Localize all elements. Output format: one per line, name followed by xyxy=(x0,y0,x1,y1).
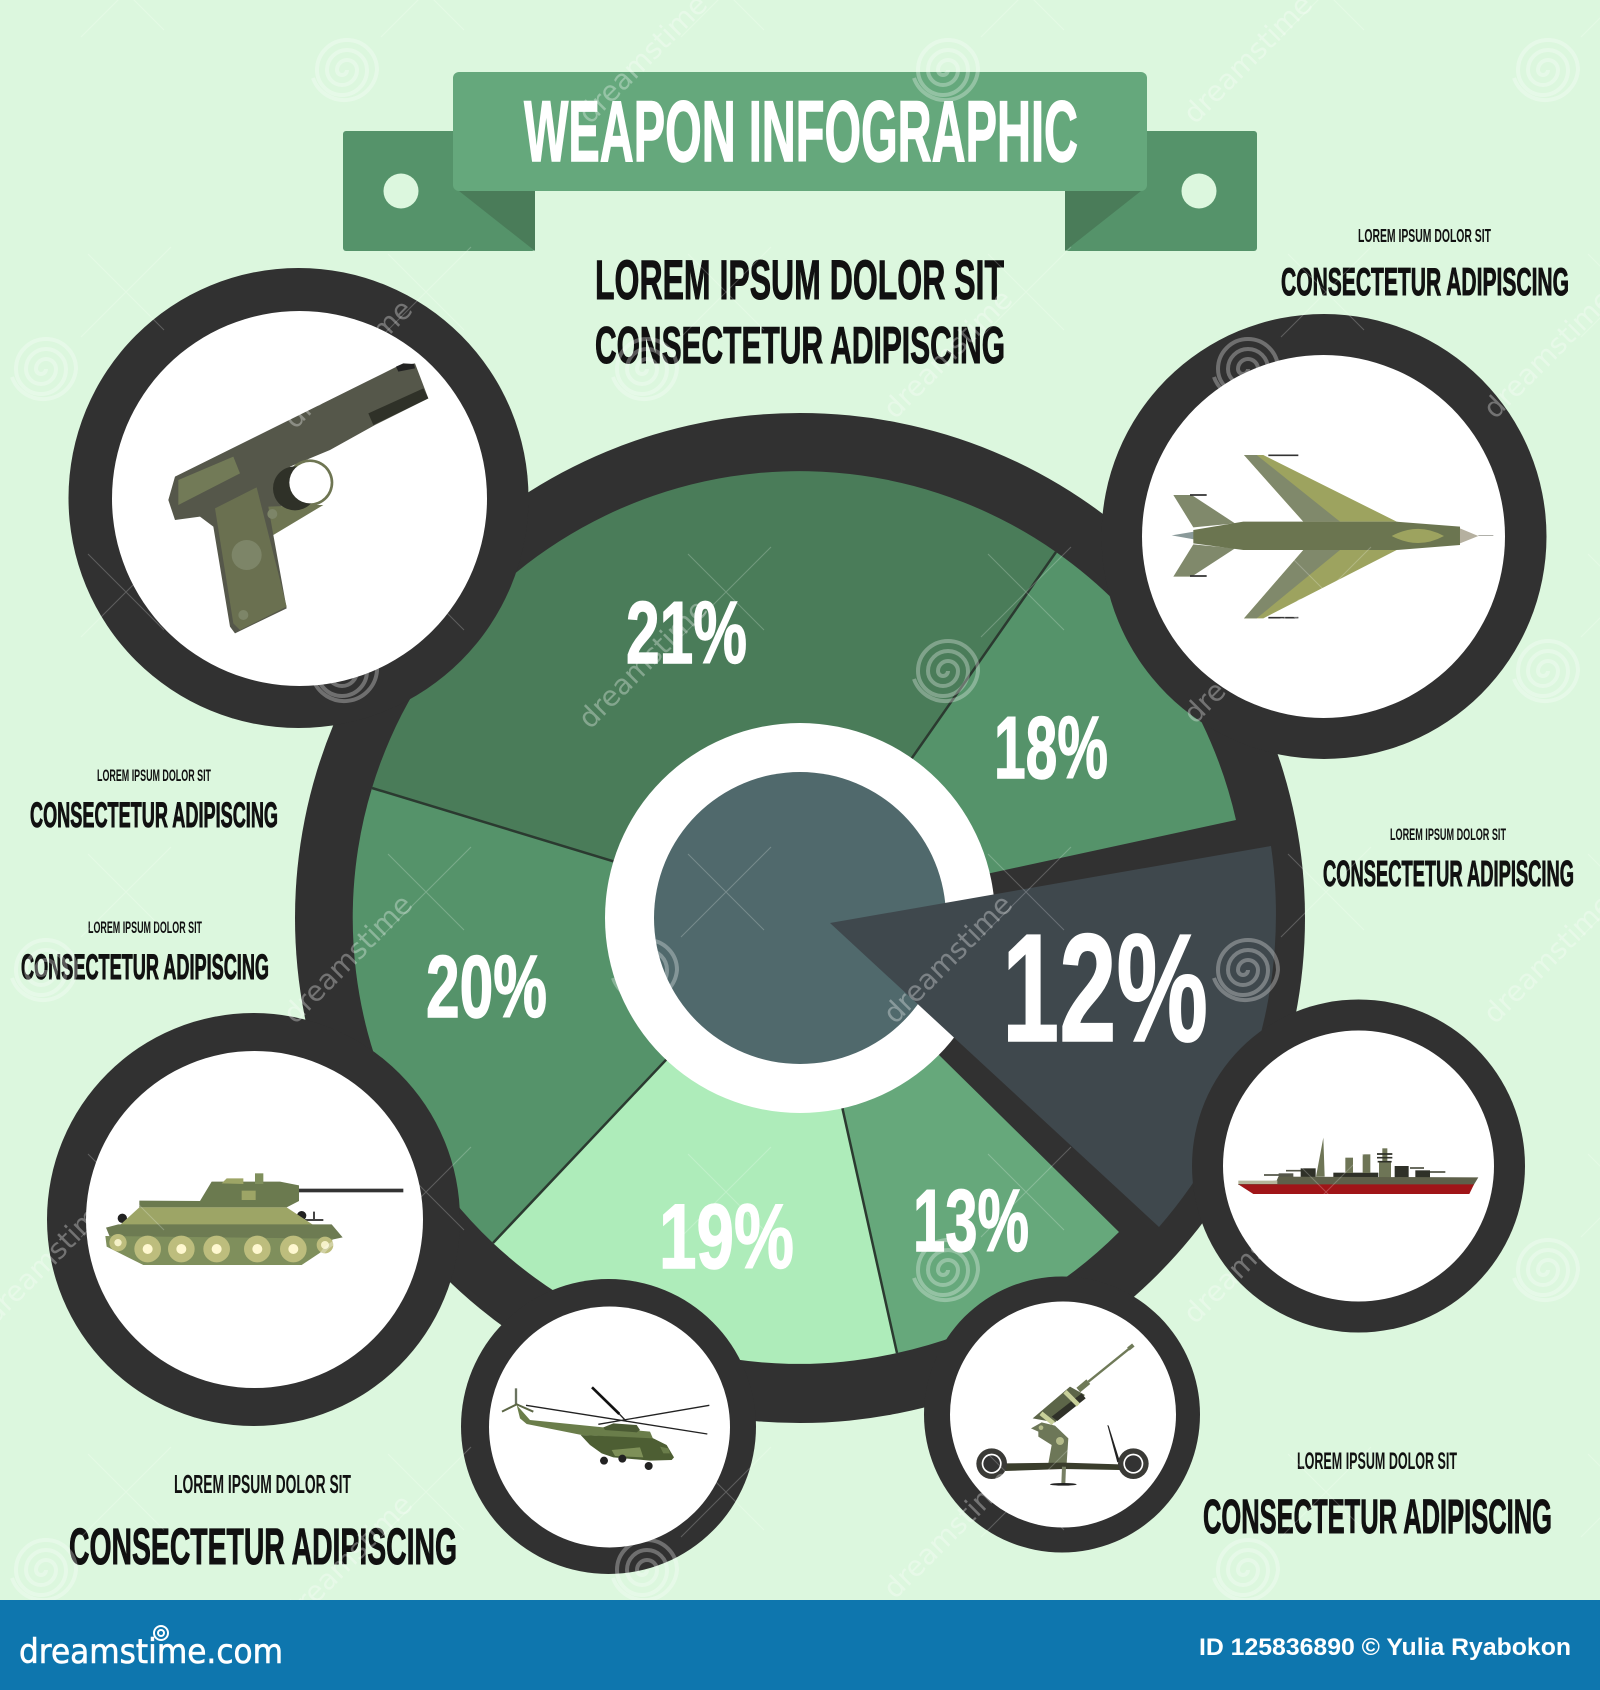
footer bar xyxy=(0,1600,1600,1690)
icon: tank xyxy=(105,1173,403,1265)
chart dark base xyxy=(295,413,1305,1423)
banner right hole xyxy=(1182,174,1216,208)
footer credit: ID 125836890 © Yulia Ryabokon xyxy=(1199,1634,1571,1661)
footer logo spiral xyxy=(154,1626,168,1640)
text block: bottom left: CONSECTETUR ADIPISCING xyxy=(69,1518,457,1575)
text block: bottom right: LOREM IPSUM DOLOR SIT xyxy=(1297,1448,1457,1475)
text block: top right: LOREM IPSUM DOLOR SIT xyxy=(1358,226,1491,246)
banner right tail xyxy=(1065,131,1257,251)
text: dreamstime xyxy=(877,888,1019,1030)
text block: bottom right xyxy=(1203,1448,1552,1544)
text: dreamstime xyxy=(877,283,1019,425)
icon: fighter jet xyxy=(1172,455,1493,618)
text: dreamstime xyxy=(277,1488,419,1630)
text block: bottom left xyxy=(69,1469,457,1575)
subtitle: CONSECTETUR ADIPISCING xyxy=(595,317,1005,375)
banner left fold xyxy=(459,191,535,251)
text block: left upper: LOREM IPSUM DOLOR SIT xyxy=(97,766,211,785)
slice 18% xyxy=(800,552,1236,918)
jet badge ring xyxy=(1102,314,1546,759)
donut chart xyxy=(295,413,1305,1423)
12 percent: 12% xyxy=(1002,902,1208,1074)
20 percent: 20% xyxy=(426,937,547,1036)
slice separator lines xyxy=(372,552,1056,1353)
text: dreamstime xyxy=(1177,1188,1319,1330)
highlighted slice 12% xyxy=(830,846,1276,1227)
13 percent: 13% xyxy=(913,1171,1029,1270)
helicopter badge xyxy=(461,1279,756,1574)
center ring xyxy=(605,723,995,1113)
text: dreamstime xyxy=(277,888,419,1030)
text block: left upper: CONSECTETUR ADIPISCING xyxy=(30,796,278,835)
slice 21% xyxy=(372,471,1056,918)
helicopter badge disc xyxy=(489,1306,730,1548)
subtitle: LOREM IPSUM DOLOR SIT xyxy=(595,248,1004,311)
title: WEAPON INFOGRAPHIC xyxy=(524,84,1078,180)
text: dreamstime xyxy=(277,293,419,435)
18 percent: 18% xyxy=(994,698,1108,797)
tank badge xyxy=(47,1013,460,1426)
slice 13% xyxy=(800,918,1119,1353)
howitzer badge xyxy=(924,1276,1200,1552)
tank badge disc xyxy=(86,1051,423,1388)
ship badge disc xyxy=(1223,1030,1494,1302)
text block: left lower xyxy=(21,918,269,987)
text block: right middle xyxy=(1323,825,1574,894)
banner left tail xyxy=(343,131,535,251)
footer background xyxy=(0,1600,1600,1690)
icon: howitzer xyxy=(976,1345,1149,1486)
pistol badge xyxy=(68,268,528,728)
text block: left upper xyxy=(30,766,278,835)
tank badge ring xyxy=(47,1013,460,1426)
pistol badge ring xyxy=(68,268,528,728)
slice 19% xyxy=(493,918,897,1364)
percentage labels xyxy=(426,583,1208,1288)
text block: left lower: CONSECTETUR ADIPISCING xyxy=(21,948,269,987)
howitzer badge ring xyxy=(924,1276,1200,1552)
icon: warship xyxy=(1238,1138,1478,1194)
text block: top right xyxy=(1281,226,1569,304)
text block: bottom left: LOREM IPSUM DOLOR SIT xyxy=(174,1469,351,1499)
banner main panel xyxy=(453,72,1147,191)
helicopter badge ring xyxy=(461,1279,756,1574)
text: dreamstime xyxy=(877,1463,1019,1605)
subtitle xyxy=(595,248,1005,375)
icon: helicopter xyxy=(502,1387,709,1470)
banner right fold xyxy=(1065,191,1141,251)
ship badge xyxy=(1192,1000,1525,1332)
jet badge xyxy=(1102,314,1546,759)
howitzer badge disc xyxy=(950,1302,1176,1528)
19 percent: 19% xyxy=(659,1186,794,1288)
text: dreamstime xyxy=(1177,588,1319,730)
title banner xyxy=(343,72,1257,251)
center disc xyxy=(654,772,946,1064)
21 percent: 21% xyxy=(626,583,747,682)
pistol badge disc xyxy=(112,311,487,686)
ship badge ring xyxy=(1192,1000,1525,1332)
slice 20% xyxy=(353,788,800,1243)
text block: left lower: LOREM IPSUM DOLOR SIT xyxy=(88,918,202,937)
jet badge disc xyxy=(1142,355,1505,718)
text: dreamstime xyxy=(572,593,714,735)
icon: pistol xyxy=(168,363,428,633)
banner left hole xyxy=(384,174,418,208)
footer logo text: dreamstime.com xyxy=(19,1632,283,1672)
